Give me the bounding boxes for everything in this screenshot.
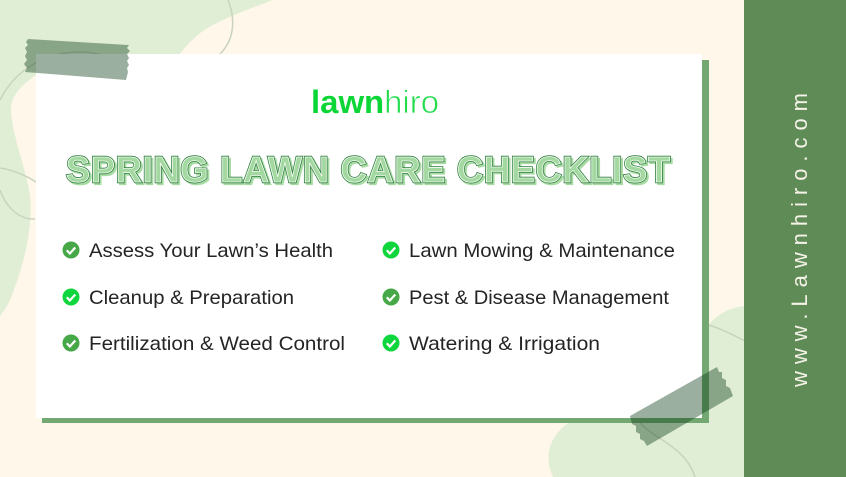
- sidebar: [744, 0, 846, 477]
- blob: bottom right: [548, 306, 745, 477]
- item: pest: Pest & Disease Management: [409, 287, 670, 309]
- logo: lawnhiro: [311, 84, 439, 120]
- checklist: left column: [62, 240, 345, 355]
- blob: top left: [0, 0, 273, 316]
- panel: card shadow: [42, 60, 709, 423]
- tape: top left: [24, 39, 130, 80]
- title: SPRING LAWN CARE CHECKLIST: [66, 149, 670, 190]
- checklist: right column: [382, 240, 675, 355]
- title: SPRING LAWN CARE CHECKLIST: [66, 149, 670, 190]
- item: assess: Assess Your Lawn’s Health: [89, 240, 333, 262]
- item: fertilization: Fertilization & Weed Control: [89, 333, 345, 355]
- panel: white card: [36, 54, 702, 418]
- tape: bottom right: [630, 367, 733, 446]
- item: mowing: Lawn Mowing & Maintenance: [409, 240, 675, 262]
- sidebar url: www.Lawnhiro.com: [787, 93, 812, 388]
- item: watering: Watering & Irrigation: [409, 333, 600, 355]
- title: SPRING LAWN CARE CHECKLIST: [68, 151, 672, 192]
- item: cleanup: Cleanup & Preparation: [89, 287, 294, 309]
